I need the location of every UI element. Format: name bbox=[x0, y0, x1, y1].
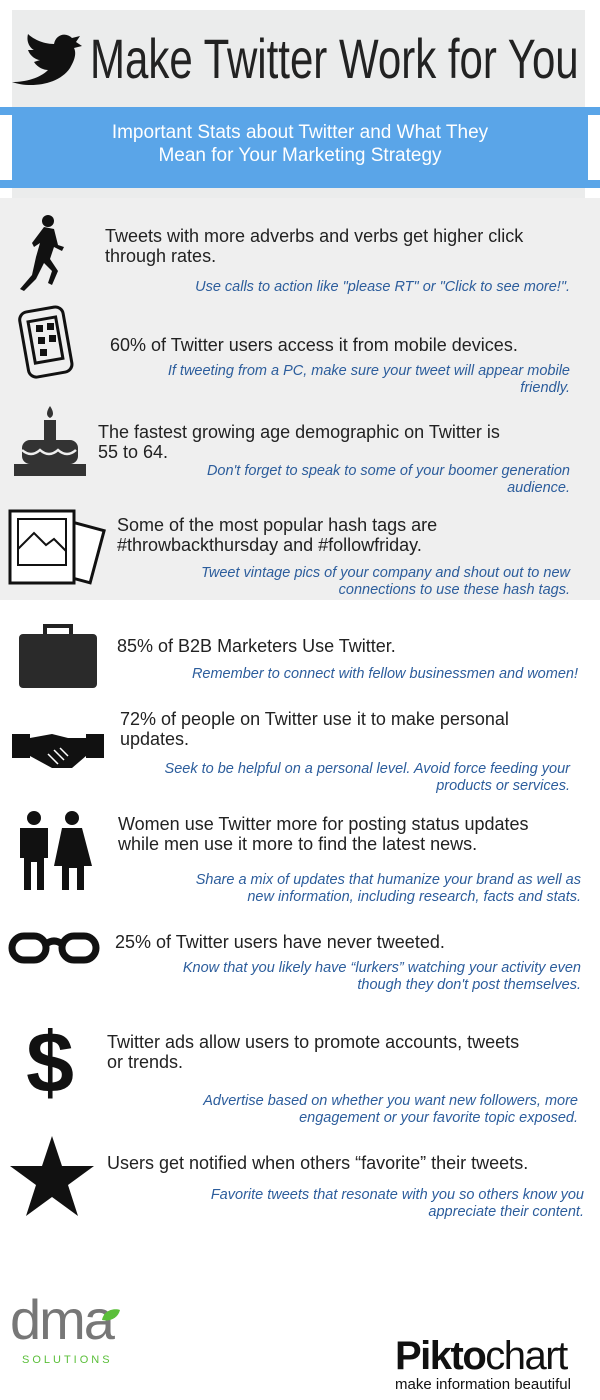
title: Make Twitter Work for You bbox=[90, 27, 579, 90]
header box bbox=[12, 10, 585, 200]
stat 6: updates. bbox=[120, 729, 189, 749]
stat 1: through rates. bbox=[105, 246, 216, 266]
icon: photos bbox=[8, 510, 106, 585]
tip 7 bbox=[196, 872, 581, 905]
icon: runner bbox=[20, 215, 64, 291]
stat 1 bbox=[105, 226, 524, 266]
tip 2: friendly. bbox=[520, 380, 570, 396]
tip 4 bbox=[201, 565, 571, 598]
tip 8: Know that you likely have “lurkers” watching your activity even bbox=[183, 960, 581, 976]
stat 1: Tweets with more adverbs and verbs get higher click bbox=[105, 226, 523, 246]
icon: mobile phone bbox=[18, 306, 74, 379]
tip 5: Remember to connect with fellow businessmen and women! bbox=[192, 666, 578, 682]
tip 3: Don't forget to speak to some of your boomer generation bbox=[207, 463, 570, 479]
stat 4: #throwbackthursday and #followfriday. bbox=[117, 535, 422, 555]
icon: twitter bird bbox=[12, 34, 82, 85]
tip 10: appreciate their content. bbox=[428, 1204, 584, 1220]
stat 3: The fastest growing age demographic on Twitter is bbox=[98, 422, 500, 442]
icon: briefcase bbox=[19, 624, 97, 688]
icon: man and woman bbox=[20, 811, 92, 890]
tip 8: though they don't post themselves. bbox=[357, 977, 581, 993]
stat 9: or trends. bbox=[107, 1052, 183, 1072]
logo: dma solutions: dma bbox=[10, 1288, 113, 1351]
logo: dma solutions: SOLUTIONS bbox=[22, 1354, 113, 1366]
logo: piktochart: make information beautiful bbox=[395, 1376, 571, 1393]
tip 10: Favorite tweets that resonate with you so others know you bbox=[211, 1187, 584, 1203]
tip 9: engagement or your favorite topic exposed. bbox=[299, 1110, 578, 1126]
tip 7: new information, including research, facts and stats. bbox=[247, 889, 581, 905]
icon: dollar sign: $ bbox=[26, 1015, 74, 1111]
tip 9 bbox=[202, 1093, 578, 1126]
icon: handshake bbox=[12, 734, 104, 768]
icon: birthday cake bbox=[14, 406, 86, 476]
tip 6: products or services. bbox=[436, 778, 570, 794]
tip 4: Tweet vintage pics of your company and shout out to new bbox=[201, 565, 570, 581]
tip 6: Seek to be helpful on a personal level. Avoid force feeding your bbox=[165, 761, 570, 777]
banner: subtitle: Important Stats about Twitter and What They bbox=[112, 122, 488, 143]
stat 2: 60% of Twitter users access it from mobile devices. bbox=[110, 335, 518, 355]
stat 7: Women use Twitter more for posting status updates bbox=[118, 814, 529, 834]
stat 9: Twitter ads allow users to promote accounts, tweets bbox=[107, 1032, 519, 1052]
tip 3: audience. bbox=[507, 480, 570, 496]
stat 8: 25% of Twitter users have never tweeted. bbox=[115, 932, 445, 952]
tip 3 bbox=[207, 463, 570, 496]
tip 2: If tweeting from a PC, make sure your tweet will appear mobile bbox=[168, 363, 570, 379]
stat 9 bbox=[107, 1032, 519, 1072]
banner: subtitle bbox=[0, 107, 600, 188]
tip 2 bbox=[168, 363, 570, 396]
tip 4: connections to use these hash tags. bbox=[339, 582, 570, 598]
textured grey section bbox=[0, 198, 600, 600]
stat 5: 85% of B2B Marketers Use Twitter. bbox=[117, 636, 396, 656]
tip 6 bbox=[165, 761, 570, 794]
stat 4 bbox=[117, 515, 437, 555]
stat 7: while men use it more to find the latest news. bbox=[118, 834, 477, 854]
stat 3: 55 to 64. bbox=[98, 442, 168, 462]
logo: piktochart: Piktochart bbox=[395, 1334, 567, 1378]
stat 6: 72% of people on Twitter use it to make personal bbox=[120, 709, 509, 729]
tip 8 bbox=[183, 960, 581, 993]
tip 10 bbox=[211, 1187, 584, 1220]
tip 7: Share a mix of updates that humanize your brand as well as bbox=[196, 872, 581, 888]
icon: glasses bbox=[8, 932, 100, 964]
stat 3 bbox=[98, 422, 500, 462]
tip 9: Advertise based on whether you want new followers, more bbox=[203, 1093, 578, 1109]
stat 10: Users get notified when others “favorite” their tweets. bbox=[107, 1153, 528, 1173]
stat 4: Some of the most popular hash tags are bbox=[117, 515, 437, 535]
banner: subtitle: Mean for Your Marketing Strategy bbox=[158, 145, 442, 166]
stat 7 bbox=[118, 814, 529, 854]
tip 1: Use calls to action like "please RT" or "Click to see more!". bbox=[195, 279, 570, 295]
stat 6 bbox=[120, 709, 509, 749]
icon: star bbox=[10, 1136, 94, 1216]
